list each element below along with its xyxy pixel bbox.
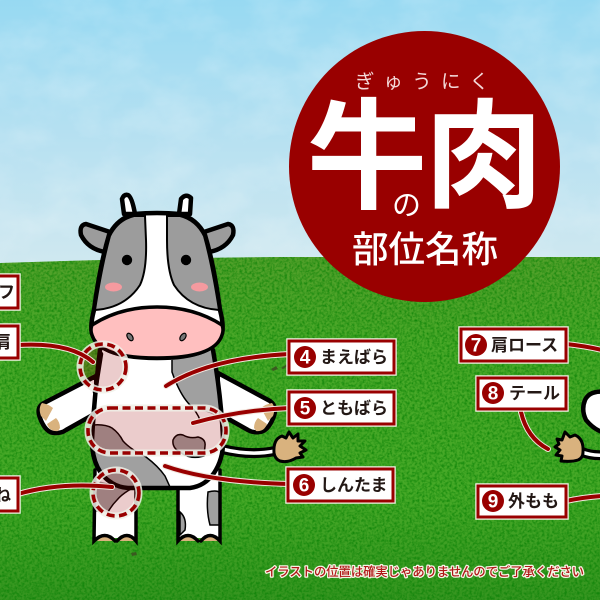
cow head [91, 213, 223, 358]
highlight: thigh circle [93, 470, 139, 516]
label 5 ともばら [289, 392, 394, 424]
nostrils [126, 332, 187, 342]
eyes [122, 255, 191, 265]
highlight: belly rounded rectangle [88, 408, 226, 453]
cheeks [105, 282, 208, 292]
leader lines [18, 344, 600, 501]
label 4 まえばら: 4 [300, 348, 311, 368]
title main second character: 肉 [425, 92, 543, 224]
label 6 しんたま [288, 469, 393, 501]
label 8 テール: 8 [488, 384, 498, 404]
second cow tail [555, 432, 600, 461]
label 7 肩ロース: 7 [471, 336, 481, 356]
title main: 牛 [307, 91, 427, 225]
label 7 肩ロース [461, 329, 566, 361]
cow tail [222, 432, 306, 462]
sky background [0, 0, 600, 264]
label 9 外もも [478, 486, 566, 517]
label 5 ともばら: ともばら [320, 399, 388, 418]
grass field [0, 250, 600, 600]
label 4 まえばら: まえばら [320, 348, 388, 367]
label: cropped thigh [0, 478, 18, 511]
label: cropped top-left [0, 276, 18, 308]
cow arms [39, 373, 275, 433]
disclaimer: イラストの位置は確実じゃありませんのでご了承ください [265, 564, 584, 579]
subtitle: 部位名称 [352, 229, 498, 270]
label 9 外もも: 9 [488, 492, 498, 512]
title particle: の [392, 190, 421, 222]
highlight: shoulder circle [80, 344, 126, 390]
label: cropped shoulder [0, 326, 18, 358]
label 9 外もも: 外もも [508, 492, 559, 511]
label 6 しんたま: しんたま [320, 476, 388, 495]
cow horns [122, 195, 191, 214]
label 6 しんたま: 6 [299, 476, 309, 496]
label 8 テール [478, 378, 566, 409]
title badge [289, 31, 560, 302]
label 4 まえばら [289, 341, 394, 373]
illustration: cow [39, 195, 306, 541]
title reading: ぎゅうにく [355, 71, 489, 93]
label 5 ともばら: 5 [300, 398, 311, 420]
cow body [92, 350, 223, 512]
label 8 テール: テール [509, 384, 560, 403]
cow ears [81, 224, 233, 252]
label 7 肩ロース: 肩ロース [491, 336, 558, 355]
second cow body [583, 392, 600, 433]
illustration: second cow, cropped at the right edge [555, 392, 600, 461]
cow legs [94, 470, 220, 541]
